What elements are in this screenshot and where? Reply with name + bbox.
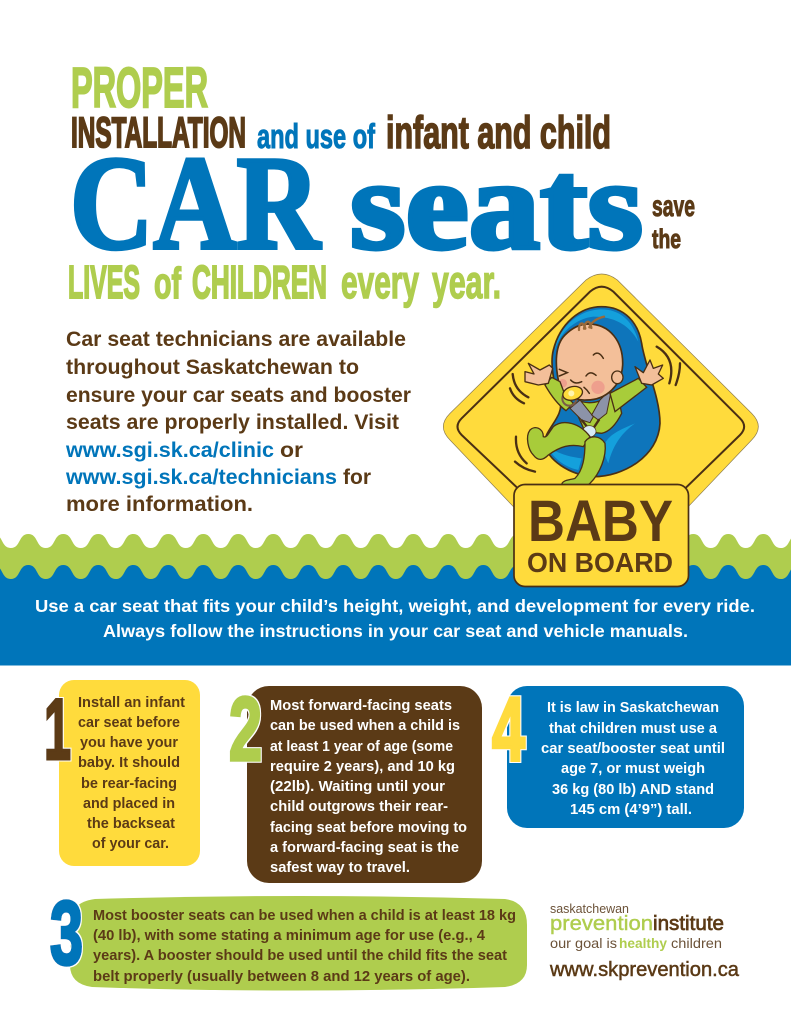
intro text block: more information.	[66, 493, 253, 516]
title: CHILDREN	[192, 256, 327, 308]
step 2 text: child outgrows their rear-	[270, 799, 448, 815]
step 4 text: car seat/booster seat until	[541, 741, 725, 757]
number 4: 4	[492, 680, 525, 780]
green wave band	[0, 534, 791, 590]
step 4 text	[541, 700, 725, 818]
title: seats	[350, 134, 643, 276]
step 1 text: Install an infant	[78, 695, 185, 711]
panel: step 2	[229, 680, 482, 883]
title: LIVES	[68, 256, 140, 308]
legs	[528, 423, 590, 459]
title: infant and child	[386, 107, 611, 158]
step 3 text	[93, 908, 516, 985]
baby head	[556, 324, 623, 400]
step 4 text: 36 kg (80 lb) AND stand	[552, 782, 714, 798]
step 1 text: baby. It should	[78, 755, 180, 771]
logo: Saskatchewan Prevention Institute: institute	[653, 912, 724, 935]
cheeks	[591, 381, 605, 394]
step 4 text: that children must use a	[549, 721, 718, 737]
hands	[525, 363, 553, 385]
title: CAR	[70, 129, 321, 277]
ear	[612, 371, 623, 384]
step 2 text: at least 1 year of age (some	[270, 739, 453, 755]
intro text block: www.sgi.sk.ca/clinic	[65, 439, 274, 462]
step 2 text	[270, 698, 467, 876]
title: year.	[432, 256, 501, 308]
number 1: 1	[44, 682, 71, 778]
pacifier	[562, 392, 576, 406]
step 1 text: the backseat	[87, 816, 175, 832]
step 3 text: years). A booster should be used until the child fits the seat	[93, 948, 507, 964]
intro text block: ensure your car seats and booster	[66, 384, 411, 407]
step 1 text: and placed in	[83, 796, 175, 812]
buckle	[583, 426, 596, 437]
step 1 text: of your car.	[92, 836, 169, 852]
sign text: baby: BABY	[528, 489, 673, 554]
step 2 text: can be used when a child is	[270, 718, 460, 734]
intro text block: for	[343, 466, 371, 489]
step 2 text: require 2 years), and 10 kg	[270, 759, 455, 775]
hair	[579, 317, 604, 330]
blue banner: Use a car seat that fits your child’s height, weight, and development for every ride.	[35, 596, 755, 616]
step 4 text: 145 cm (4’9”) tall.	[570, 802, 692, 818]
title: every	[341, 256, 419, 308]
title: the	[652, 224, 681, 254]
title: save	[652, 190, 695, 223]
logo: Saskatchewan Prevention Institute: prevention	[550, 912, 653, 935]
intro text block: www.sgi.sk.ca/technicians	[65, 466, 337, 489]
baby torso	[578, 390, 622, 433]
car seat	[545, 307, 660, 477]
harness straps	[570, 388, 612, 423]
step 3 text: belt properly (usually between 8 and 12 years of age).	[93, 969, 470, 985]
title: PROPER	[71, 56, 208, 120]
step 3 text: Most booster seats can be used when a child is at least 18 kg	[93, 908, 516, 924]
number 3: 3	[50, 884, 83, 984]
intro text block: or	[280, 439, 303, 462]
sign diamond	[443, 274, 758, 508]
title: and use of	[257, 118, 375, 156]
title: of	[154, 259, 181, 308]
number 2: 2	[229, 680, 262, 780]
panel: step 1	[44, 680, 200, 866]
logo: Saskatchewan Prevention Institute: children	[671, 935, 722, 951]
step 2 text: facing seat before moving to	[270, 820, 467, 836]
intro text block: throughout Saskatchewan to	[66, 356, 359, 379]
arms	[545, 377, 573, 411]
logo: Saskatchewan Prevention Institute: our goal is	[550, 935, 617, 951]
step 3 text: (40 lb), with some stating a minimum age for use (e.g., 4	[93, 928, 485, 944]
step 2 text: safest way to travel.	[270, 860, 410, 876]
step 2 text: (22lb). Waiting until your	[270, 779, 445, 795]
intro text block: Car seat technicians are available	[66, 328, 406, 351]
logo: Saskatchewan Prevention Institute	[549, 901, 740, 981]
eyes and mouth	[559, 353, 603, 393]
panel: step 3	[50, 884, 527, 990]
step 1 text: you have your	[80, 735, 178, 751]
motion lines	[510, 347, 680, 472]
sign label plate	[514, 484, 688, 586]
sign text: on board: ON BOARD	[527, 547, 673, 578]
step 1 text	[78, 695, 185, 852]
step 2 text: a forward-facing seat is the	[270, 840, 459, 856]
website: www.skprevention.ca	[549, 959, 740, 981]
logo: Saskatchewan Prevention Institute: healthy	[619, 935, 667, 951]
intro text block	[65, 328, 411, 516]
panel: step 4	[492, 680, 744, 828]
step 1 text: be rear-facing	[81, 776, 177, 792]
step 4 text: age 7, or must weigh	[561, 761, 705, 777]
step 4 text: It is law in Saskatchewan	[547, 700, 719, 716]
logo: Saskatchewan Prevention Institute: saskatchewan	[550, 901, 629, 916]
blue banner	[0, 565, 791, 666]
title	[68, 56, 695, 308]
step 2 text: Most forward-facing seats	[270, 698, 452, 714]
blue banner: Always follow the instructions in your car seat and vehicle manuals.	[103, 621, 688, 641]
intro text block: seats are properly installed. Visit	[66, 411, 399, 434]
step 1 text: car seat before	[78, 715, 180, 731]
title: INSTALLATION	[71, 109, 246, 157]
icon: baby on board sign	[443, 274, 758, 586]
